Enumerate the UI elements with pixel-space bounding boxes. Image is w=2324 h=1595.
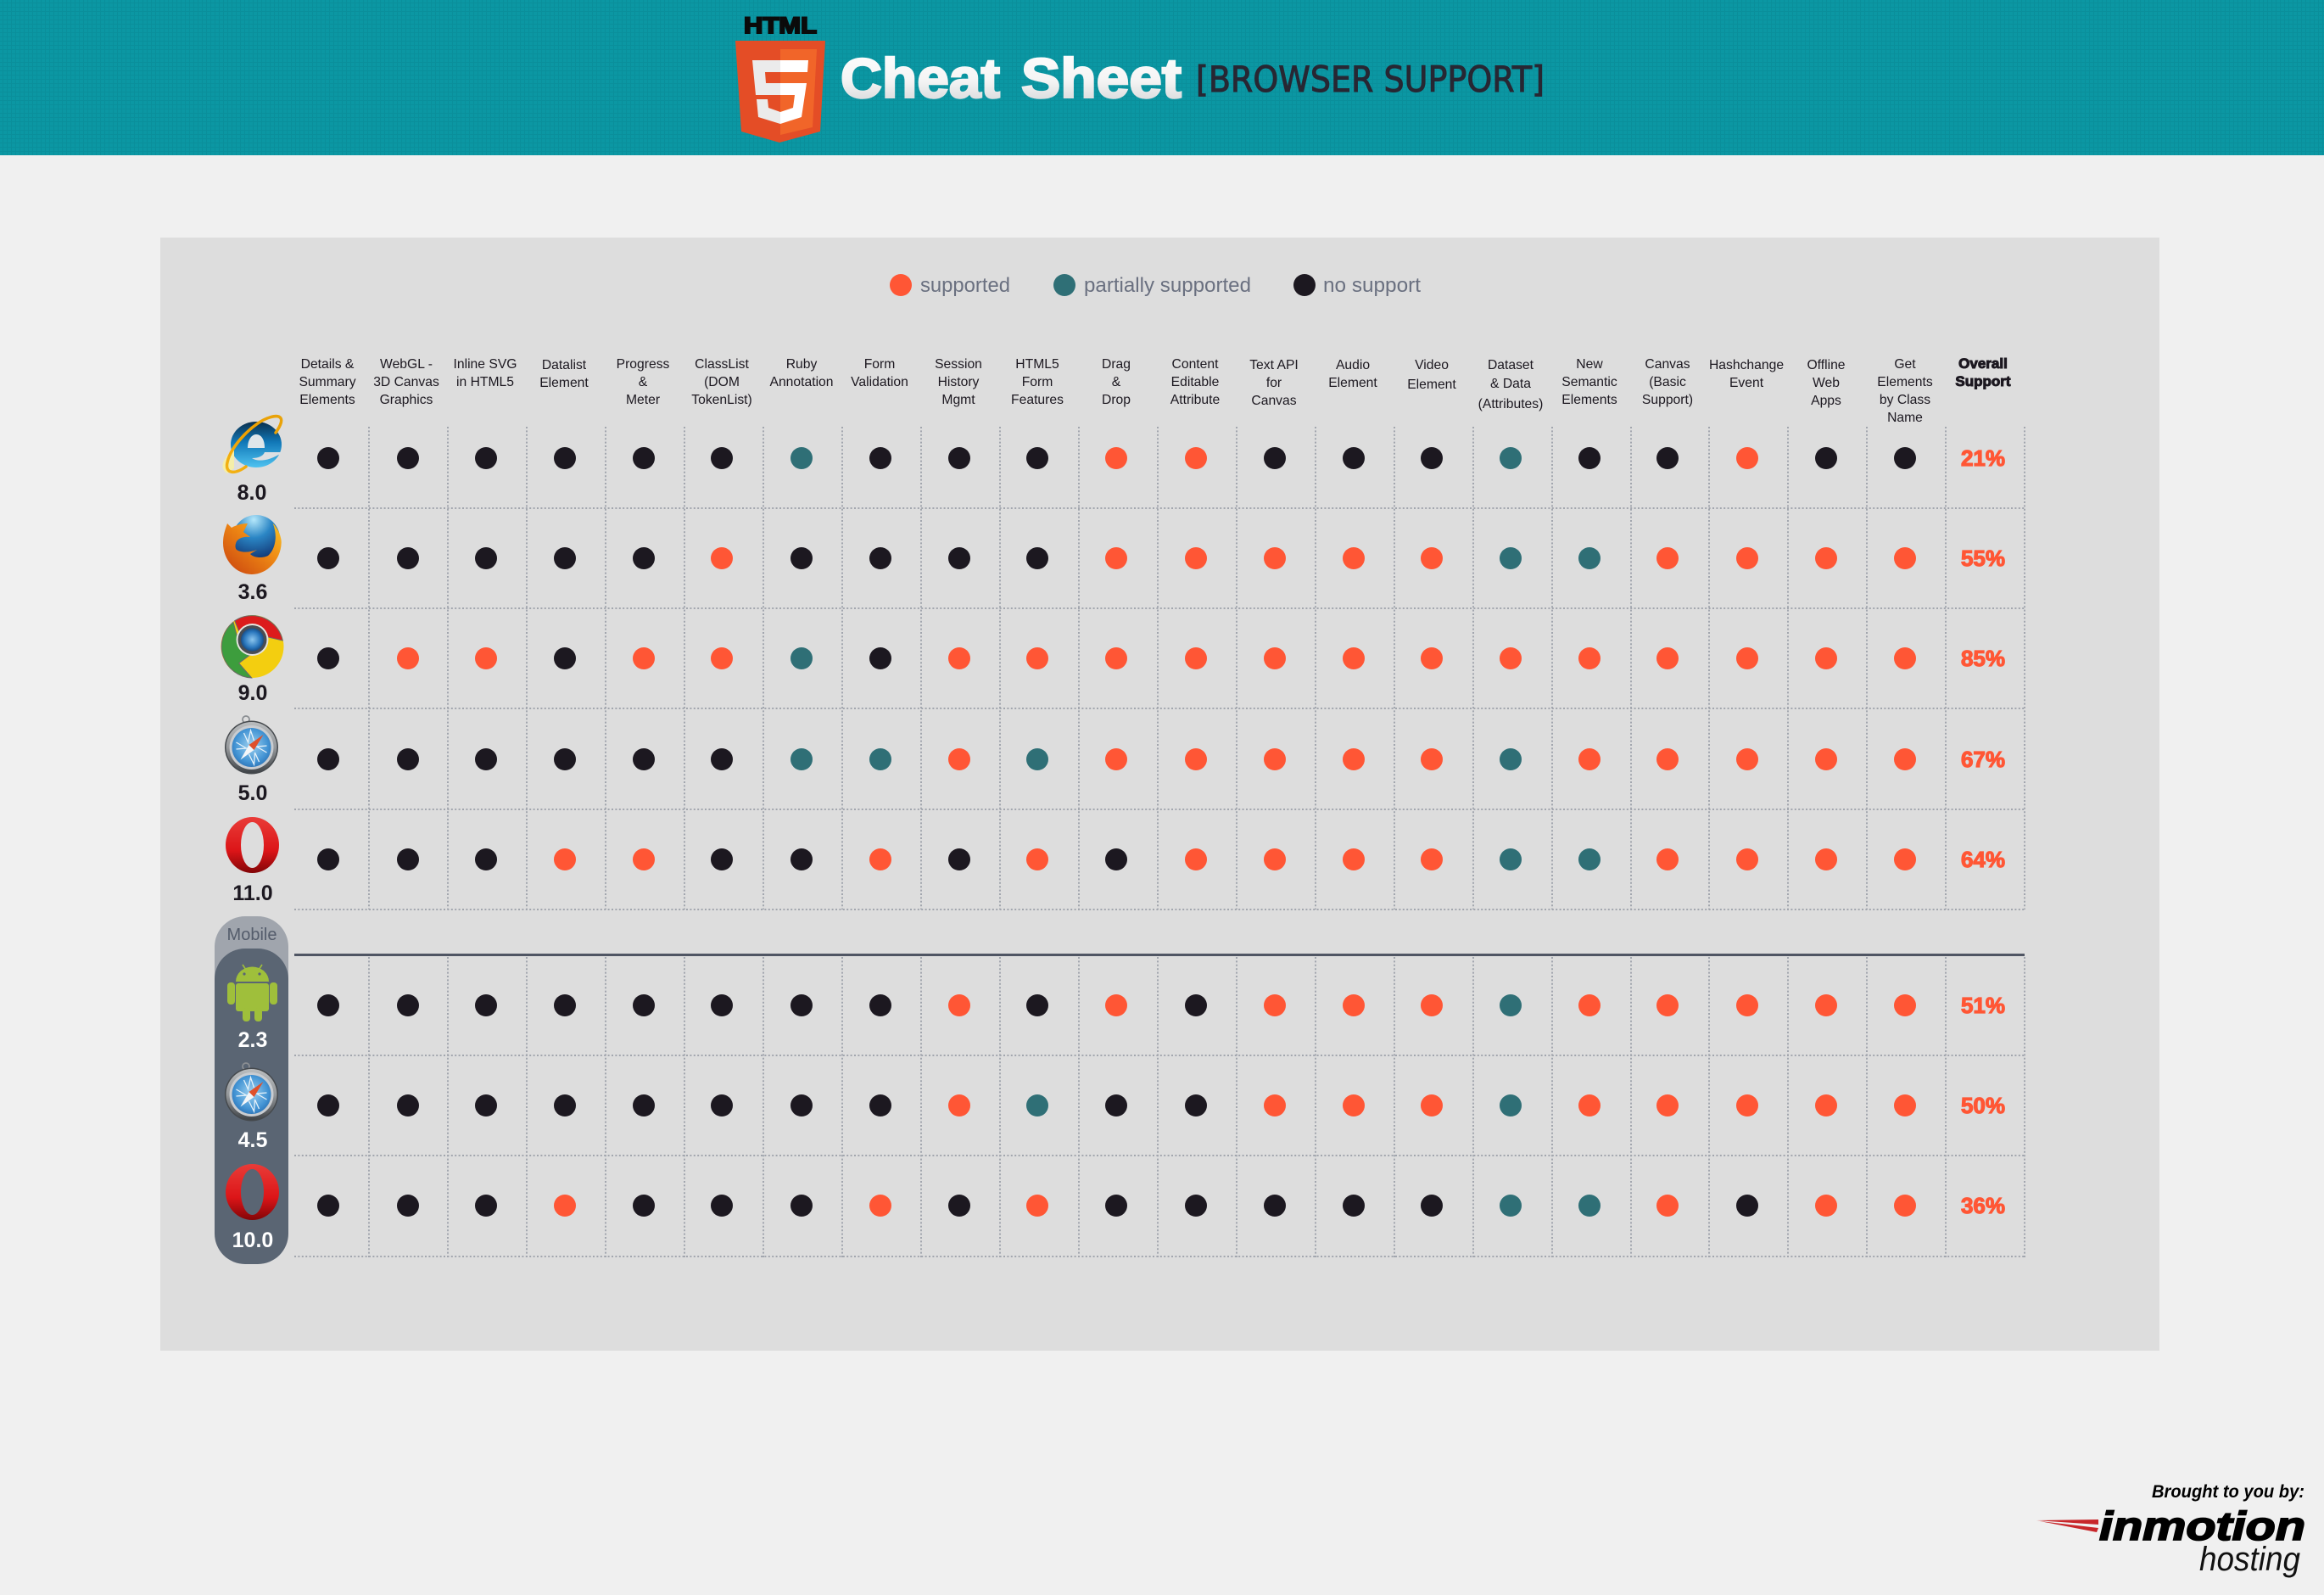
logo swoosh	[2036, 1519, 2098, 1532]
header: Video: Element	[1407, 378, 1456, 392]
legend item: no support: no support	[1323, 274, 1421, 297]
row: Firefox 3.6: 55%	[1961, 546, 2005, 571]
version: Chrome 9.0: 9.0	[238, 681, 267, 705]
header: Dataset: Dataset	[1488, 358, 1534, 372]
heading: Cheat Sheet: Sheet	[1021, 47, 1182, 109]
icon: Android	[227, 965, 277, 1021]
header: Session History: Mgmt	[941, 393, 975, 407]
header banner	[0, 0, 2324, 155]
header: Canvas: (Basic	[1649, 375, 1686, 389]
row: Firefox 3.6	[317, 546, 2005, 571]
header: HTML5 Form Features: HTML5	[1015, 357, 1059, 372]
logo: inmotion: inmotion	[2099, 1503, 2305, 1548]
header: Session History: Session	[935, 357, 982, 372]
label: Mobile: Mobile	[227, 926, 277, 944]
heading: browser support: [BROWSER SUPPORT]	[1196, 59, 1545, 100]
panel: chart background	[160, 238, 2159, 1351]
header: Get Elements: by Class	[1880, 393, 1930, 407]
header: Get Elements: Name	[1887, 411, 1923, 425]
header: Inline SVG: Inline SVG	[453, 357, 517, 372]
footer: InMotion Hosting credit	[2036, 1482, 2305, 1578]
header: Content Editable: Editable	[1171, 375, 1220, 389]
header: Content Editable: Attribute	[1170, 393, 1220, 407]
header: WebGL: WebGL -	[380, 357, 433, 372]
header: Text API: for	[1266, 376, 1282, 390]
header: Datalist: Element	[539, 376, 589, 390]
heading: Cheat Sheet	[841, 47, 1182, 109]
version: Opera 11.0: 11.0	[232, 881, 273, 905]
header: WebGL: 3D Canvas	[373, 375, 439, 389]
icon: Safari mobile	[225, 1063, 278, 1122]
icon: Firefox	[223, 515, 282, 574]
header: Hashchange: Event	[1729, 376, 1764, 390]
header: New Semantic: New	[1576, 357, 1603, 372]
row: Opera mobile 10.0: 36%	[1961, 1193, 2005, 1218]
version: IE 8.0: 8.0	[237, 481, 266, 505]
row: IE 8.0	[317, 445, 2005, 471]
header: Details & Summary Elements: Details &	[301, 357, 355, 372]
header: Get Elements: Elements	[1877, 375, 1933, 389]
header: New Semantic: Elements	[1561, 393, 1617, 407]
header: Text API: Text API	[1249, 358, 1299, 372]
header: Progress & Meter: &	[639, 375, 648, 389]
credit line: Brought to you by:	[2152, 1482, 2304, 1502]
row: Chrome 9.0: 85%	[1961, 646, 2005, 671]
mobile section divider	[294, 954, 2025, 956]
header: Inline SVG: in HTML5	[456, 375, 514, 389]
heading: Cheat Sheet: Cheat	[841, 47, 1000, 109]
logo: hosting: hosting	[2199, 1541, 2300, 1578]
header: Overall Support: Overall	[1958, 355, 2008, 372]
header: Overall Support: Support	[1955, 373, 2011, 389]
row: Safari mobile 4.5	[317, 1093, 2005, 1118]
version: Firefox 3.6: 3.6	[238, 580, 267, 604]
header: New Semantic: Semantic	[1561, 375, 1617, 389]
row: Safari 5.0: 67%	[1961, 747, 2005, 772]
legend item: supported: supported	[920, 274, 1010, 297]
header: ClassList: ClassList	[695, 357, 749, 372]
row: Android 2.3	[317, 993, 2005, 1018]
header: Dataset: (Attributes)	[1478, 397, 1543, 411]
icon: Chrome	[221, 615, 283, 678]
header: Get Elements: Get	[1894, 357, 1916, 372]
icon: Opera	[226, 817, 279, 873]
header: ClassList: TokenList)	[691, 393, 752, 407]
header: Audio: Audio	[1336, 358, 1370, 372]
header: Progress & Meter: Meter	[626, 393, 660, 407]
header: HTML5 Form Features: Features	[1011, 393, 1064, 407]
header: Canvas: Canvas	[1645, 357, 1690, 372]
legend item: partially supported: partially supported	[1084, 274, 1251, 297]
header: Datalist: Datalist	[542, 358, 587, 372]
header: Canvas: Support)	[1642, 393, 1693, 407]
header: Drag & Drop: Drop	[1102, 393, 1131, 407]
header: Content Editable: Content	[1172, 357, 1219, 372]
row: Chrome 9.0	[317, 646, 2005, 671]
header: Offline Web Apps: Web	[1813, 376, 1840, 390]
version: Android 2.3: 2.3	[238, 1028, 267, 1052]
title label: HTML: HTML	[744, 13, 817, 38]
header: Session History: History	[938, 375, 980, 389]
header: Audio: Element	[1328, 376, 1377, 390]
header: WebGL: Graphics	[380, 393, 433, 407]
icon: HTML5 shield	[735, 41, 825, 143]
icon: Safari	[225, 716, 278, 774]
row: Android 2.3: 51%	[1961, 993, 2005, 1018]
row: Opera 11.0	[317, 847, 2005, 872]
mobile pill	[215, 916, 288, 1264]
header: Drag & Drop: &	[1112, 375, 1121, 389]
header: Drag & Drop: Drag	[1102, 357, 1131, 372]
row: Safari mobile 4.5: 50%	[1961, 1093, 2005, 1118]
header: Form Validation: Validation	[851, 375, 908, 389]
header: Details & Summary Elements: Summary	[299, 375, 356, 389]
legend	[890, 274, 1421, 297]
header: Text API: Canvas	[1251, 394, 1297, 408]
row: IE 8.0: 21%	[1961, 445, 2005, 471]
header: Video: Video	[1415, 358, 1449, 372]
row: Opera 11.0: 64%	[1961, 847, 2005, 872]
header: Details & Summary Elements: Elements	[299, 393, 355, 407]
header: Offline Web Apps: Apps	[1811, 394, 1841, 408]
icon: Internet Explorer	[222, 417, 282, 473]
icon: Opera mobile	[226, 1164, 279, 1220]
header: Ruby Annotation: Ruby	[786, 357, 817, 372]
header: Ruby Annotation: Annotation	[769, 375, 834, 389]
header: Progress & Meter: Progress	[617, 357, 670, 372]
version: Opera mobile 10.0: 10.0	[232, 1228, 273, 1252]
header: Hashchange: Hashchange	[1709, 358, 1784, 372]
header: HTML5 Form Features: Form	[1022, 375, 1053, 389]
header: Dataset: & Data	[1490, 377, 1531, 391]
grid lines	[294, 427, 2025, 1257]
header: ClassList: (DOM	[704, 375, 740, 389]
version: Safari 5.0: 5.0	[238, 781, 267, 805]
header: Offline Web Apps: Offline	[1807, 358, 1846, 372]
row: Safari 5.0	[317, 747, 2005, 772]
row: Opera mobile 10.0	[317, 1193, 2005, 1218]
column headers	[299, 355, 2011, 425]
version: Safari mobile 4.5: 4.5	[238, 1128, 267, 1152]
support matrix	[317, 445, 2005, 1218]
header: Form Validation: Form	[864, 357, 895, 372]
